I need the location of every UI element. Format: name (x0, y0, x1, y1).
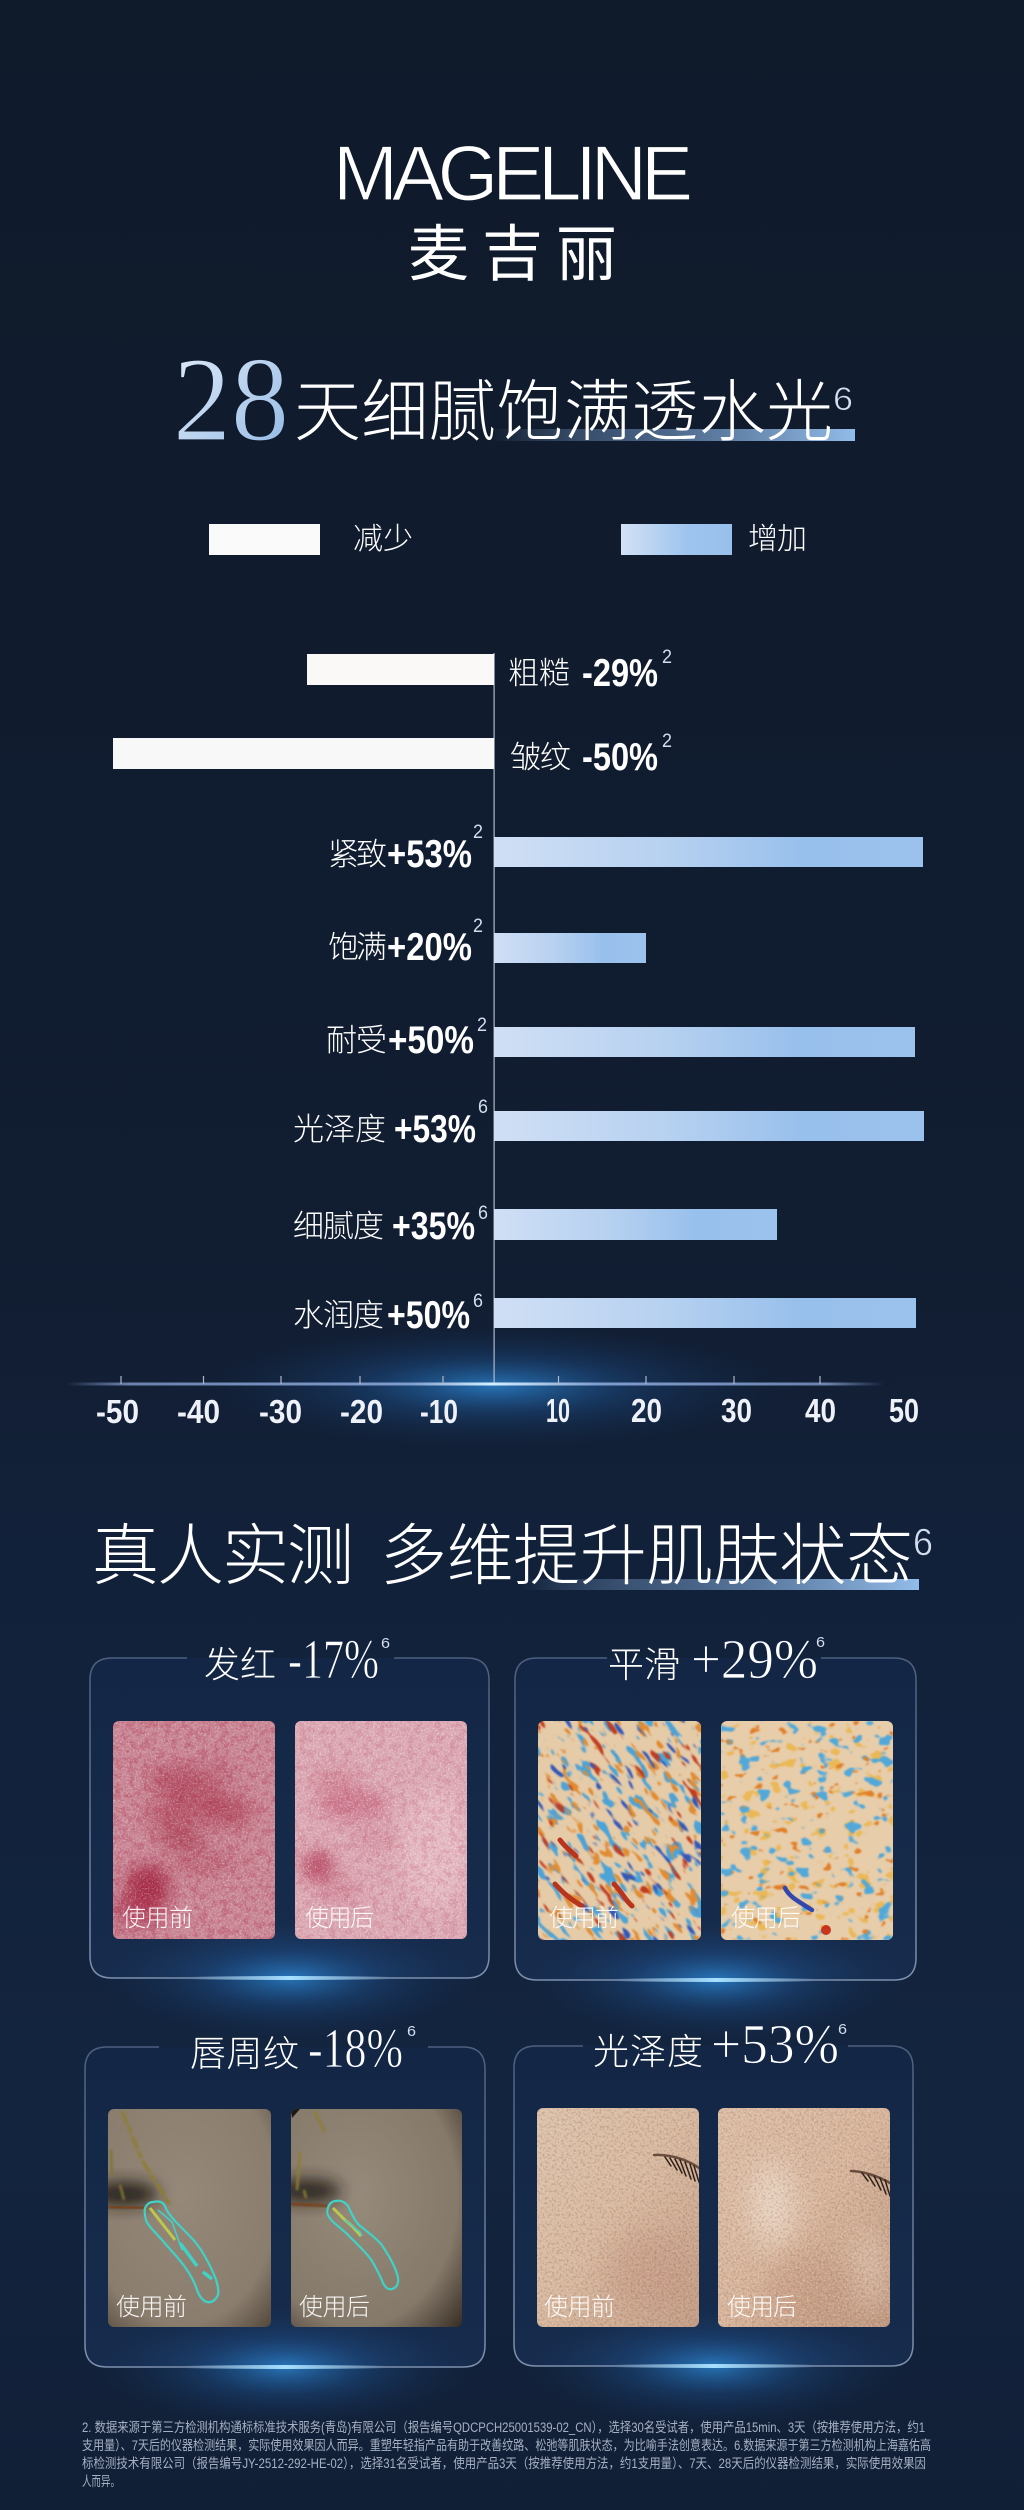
bar: firmness +53%: +53% (387, 833, 472, 876)
bar: tolerance +50% (326, 1015, 915, 1062)
title: 28 days: 28 (173, 333, 289, 467)
photo: skin before (537, 2108, 699, 2327)
bar: hydration +50%: 水润度 (293, 1298, 384, 1333)
photo: lip lines before: 使用前 (116, 2294, 187, 2321)
horizontal axis with ticks (66, 1376, 884, 1386)
title: 28 days (173, 333, 855, 467)
photo: skin after (718, 2108, 890, 2330)
bar: fineness +35%: 细腻度 (293, 1209, 384, 1244)
bar: wrinkles -50%: -50% (582, 736, 658, 779)
photo: skin after: 使用后 (727, 2294, 797, 2321)
panel title: 光泽度 (593, 2031, 703, 2072)
photo: skin before: 使用前 (544, 2294, 615, 2321)
footnote: 人而异。 (82, 2474, 120, 2489)
panel title (608, 1629, 825, 1691)
axis numbers: -20 (340, 1393, 383, 1430)
title: 28 days: 6 (833, 381, 853, 417)
bar: fineness +35%: +35% (392, 1205, 475, 1248)
bar: glossiness +53%: +53% (394, 1108, 476, 1151)
brand logo: MAGELINE (333, 129, 693, 217)
panel title: 6 (838, 2021, 847, 2038)
bar: hydration +50%: 6 (473, 1291, 483, 1312)
bar: roughness -29% (307, 647, 672, 695)
panel title (593, 2014, 847, 2076)
legend: increase (621, 523, 807, 556)
bar: fineness +35%: 6 (478, 1203, 488, 1224)
axis numbers: 20 (631, 1392, 662, 1429)
axis numbers: -50 (96, 1393, 139, 1430)
photo: lip lines after: 使用后 (299, 2294, 370, 2321)
panel title: -18% (308, 2018, 403, 2080)
photo: smoothness map before (538, 1721, 701, 1940)
photo: redness before (112, 1721, 275, 1939)
bar: plumpness +20%: +20% (387, 926, 472, 969)
icon: eyelashes (851, 2171, 890, 2196)
bar: roughness -29%: -29% (582, 652, 658, 695)
legend (209, 523, 807, 556)
panel title: 6 (816, 1634, 825, 1651)
section heading: 多维提升肌肤状态 (380, 1519, 913, 1594)
axis numbers: 40 (805, 1392, 836, 1429)
bar: firmness +53%: 2 (473, 822, 483, 843)
icon: wrinkle markup outline (145, 2201, 218, 2302)
bar: fineness +35% (293, 1203, 777, 1248)
panel title: -17% (288, 1629, 379, 1691)
bar: roughness -29%: 粗糙 (508, 656, 570, 691)
bar: plumpness +20%: 饱满 (328, 930, 387, 965)
bar: firmness +53% (328, 822, 923, 876)
brand logo: 麦吉丽 (408, 220, 617, 288)
bar: roughness -29%: 2 (662, 647, 672, 668)
photo: redness before: 使用前 (122, 1905, 193, 1932)
panel title: 发红 (204, 1644, 276, 1685)
photo: redness after: 使用后 (305, 1905, 374, 1932)
bar: glossiness +53%: 光泽度 (293, 1112, 386, 1147)
bar: tolerance +50%: +50% (388, 1019, 474, 1062)
bar: tolerance +50%: 2 (477, 1015, 487, 1036)
panel: glossiness +53% (514, 2014, 913, 2428)
photo: lip lines before (90, 2109, 271, 2327)
panel: perioral lines -18% (85, 2018, 485, 2429)
panel: redness -17% (90, 1629, 489, 2040)
panel title: 6 (407, 2023, 416, 2040)
axis numbers: -40 (177, 1393, 220, 1430)
bar: hydration +50% (293, 1291, 916, 1337)
section heading (92, 1519, 933, 1594)
axis numbers: -30 (259, 1393, 302, 1430)
legend: increase: 增加 (748, 523, 807, 556)
panel title: 6 (381, 1635, 390, 1652)
axis numbers: -10 (420, 1393, 458, 1430)
bar: wrinkles -50%: 皱纹 (510, 740, 571, 775)
panel: smoothness +29% (514, 1637, 917, 2028)
panel title (204, 1629, 390, 1691)
brand logo (333, 129, 693, 288)
photo: redness after (295, 1721, 467, 1939)
icon: eyelashes (654, 2155, 699, 2182)
panel title: +29% (691, 1629, 818, 1691)
title: 28 days: 天细腻饱满透水光 (294, 375, 833, 450)
bar: glossiness +53% (293, 1097, 924, 1151)
bar: plumpness +20%: 2 (473, 916, 483, 937)
bar: wrinkles -50%: 2 (662, 731, 672, 752)
vertical zero axis (494, 653, 495, 1384)
legend: decrease: 减少 (353, 523, 413, 556)
panel title: +53% (711, 2014, 839, 2076)
axis glow (204, 1324, 784, 1448)
panel title: 唇周纹 (190, 2033, 299, 2074)
footnote (82, 2419, 931, 2489)
photo: smoothness map after: 使用后 (731, 1905, 801, 1932)
bar: glossiness +53%: 6 (478, 1097, 488, 1118)
axis numbers (96, 1392, 919, 1430)
bar: hydration +50%: +50% (387, 1294, 470, 1337)
icon: wrinkle markup outline (327, 2201, 398, 2289)
photo: smoothness map before: 使用前 (549, 1905, 619, 1932)
bar: tolerance +50%: 耐受 (326, 1023, 387, 1058)
section heading: 真人实测 (92, 1519, 354, 1594)
axis numbers: 30 (721, 1392, 752, 1429)
section heading: 6 (913, 1522, 933, 1564)
axis numbers: 50 (889, 1392, 919, 1429)
photo: smoothness map after (721, 1721, 893, 1940)
diverging bar chart (66, 647, 924, 1448)
panel title (190, 2018, 416, 2080)
bar: plumpness +20% (328, 916, 646, 969)
legend: decrease (209, 523, 413, 556)
bar: firmness +53%: 紧致 (328, 837, 387, 872)
panel title: 平滑 (608, 1644, 680, 1685)
bar: wrinkles -50% (113, 731, 672, 779)
axis numbers: 10 (546, 1392, 570, 1429)
photo: lip lines after (273, 2109, 462, 2327)
